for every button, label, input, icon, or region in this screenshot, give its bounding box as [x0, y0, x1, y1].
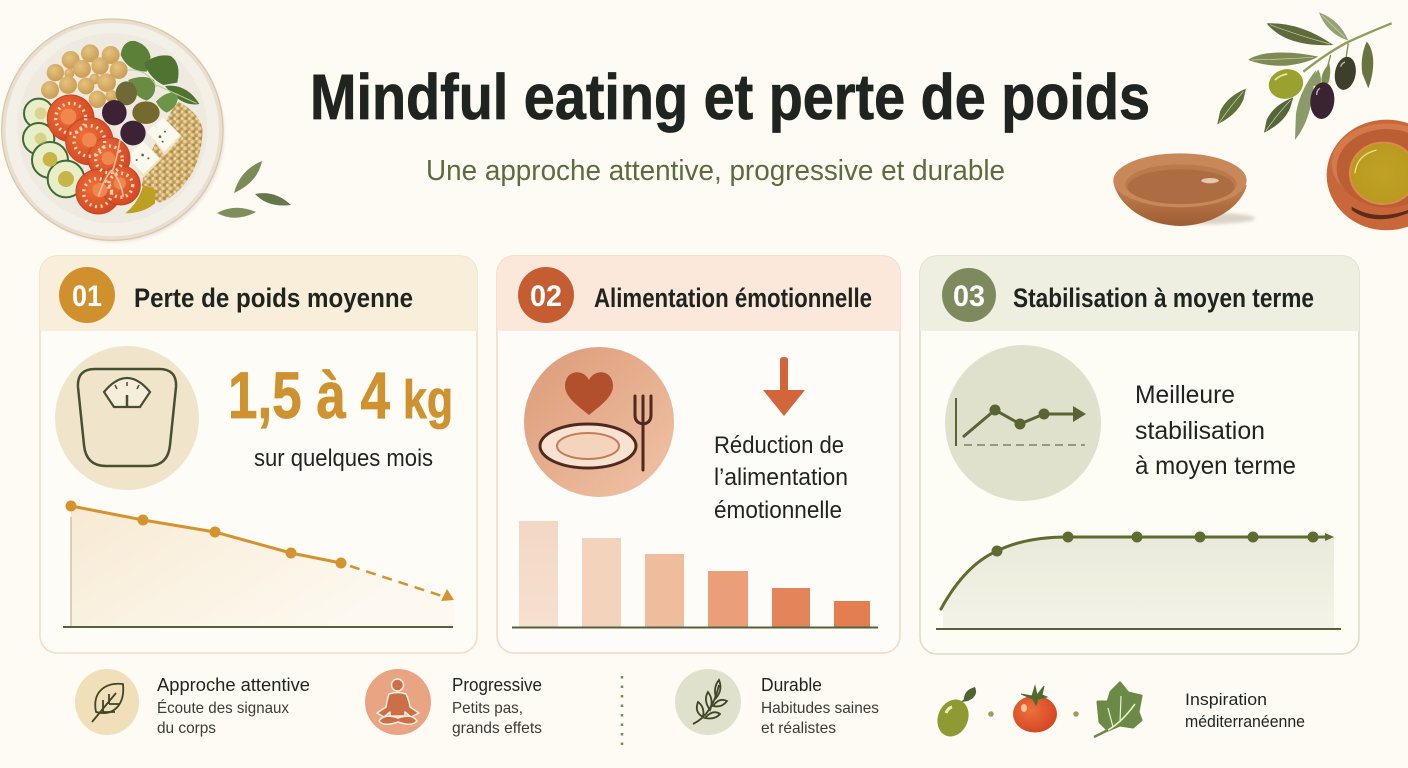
figure: 1,5 à 4 kg: kg — [403, 370, 453, 430]
icon: meditating figure — [377, 679, 419, 724]
title: Mindful eating et perte de poids — [310, 61, 1150, 133]
separator dot — [988, 711, 994, 717]
badge 03 — [942, 268, 996, 322]
footer item: durable — [675, 669, 879, 737]
text: réduction: Réduction de — [714, 432, 844, 459]
text: Durable — [761, 675, 822, 695]
text: inspiration méditerranéenne — [1185, 690, 1305, 731]
figure: 1,5 à 4 kg: 1,5 à 4 — [228, 358, 390, 432]
text: Écoute des signaux — [157, 698, 289, 717]
text: réduction — [714, 432, 848, 524]
icon: tomato — [1013, 686, 1057, 732]
bar chart: decreasing — [512, 521, 878, 628]
panel: perte de poids moyenne — [40, 256, 477, 653]
text: meilleure stabilisation: à moyen terme — [1135, 452, 1296, 480]
separator dot — [1073, 711, 1079, 717]
icon: sprig — [693, 680, 727, 724]
text: réduction: émotionnelle — [714, 497, 842, 524]
line chart: plateau — [936, 532, 1341, 629]
text: Progressive — [452, 675, 542, 695]
icon: stability chart — [945, 345, 1101, 501]
text: Petits pas, — [452, 700, 523, 717]
text: Approche attentive — [157, 675, 310, 695]
panel: stabilisation — [920, 256, 1359, 654]
icon: bathroom scale — [55, 346, 199, 490]
footer item: progressive — [365, 669, 542, 737]
icon: olive — [932, 687, 976, 741]
text — [761, 675, 879, 737]
text: inspiration méditerranéenne: méditerranéenne — [1185, 712, 1305, 731]
badge 01 — [59, 267, 115, 323]
heading: Perte de poids moyenne — [134, 283, 413, 313]
text: meilleure stabilisation: Meilleure — [1135, 381, 1235, 409]
icon: herb leaf — [1094, 683, 1141, 737]
badge 01: 01 — [72, 280, 102, 313]
text — [157, 675, 310, 737]
badge 02 — [518, 267, 574, 323]
text — [452, 675, 542, 737]
badge 03: 03 — [953, 280, 985, 313]
bowl of olive oil — [1327, 120, 1408, 230]
badge 02: 02 — [530, 280, 562, 313]
olive branch — [1217, 12, 1392, 140]
arrow: down — [763, 357, 805, 416]
small leaves beside plate — [217, 161, 291, 218]
text: grands effets — [452, 720, 542, 737]
subtitle: Une approche attentive, progressive et durable — [426, 155, 1005, 187]
icon: leaf — [92, 684, 123, 722]
text: Habitudes saines — [761, 700, 879, 717]
heading: Alimentation émotionnelle — [594, 283, 872, 313]
text: et réalistes — [761, 720, 836, 737]
text: réduction: l’alimentation — [714, 464, 848, 491]
text: meilleure stabilisation: stabilisation — [1135, 417, 1265, 445]
panel: alimentation émotionnelle — [497, 256, 900, 653]
footer item: approche attentive — [75, 669, 310, 737]
text: inspiration méditerranéenne: Inspiration — [1185, 690, 1267, 709]
terracotta bowl — [1113, 153, 1255, 226]
line chart: weight loss — [63, 500, 454, 627]
text: du corps — [157, 720, 216, 737]
icon: heart, plate and fork — [524, 347, 674, 497]
caption: sur quelques mois — [254, 445, 433, 472]
text: meilleure stabilisation — [1135, 381, 1296, 480]
heading: Stabilisation à moyen terme — [1013, 283, 1314, 313]
plate of Mediterranean food — [2, 19, 224, 242]
